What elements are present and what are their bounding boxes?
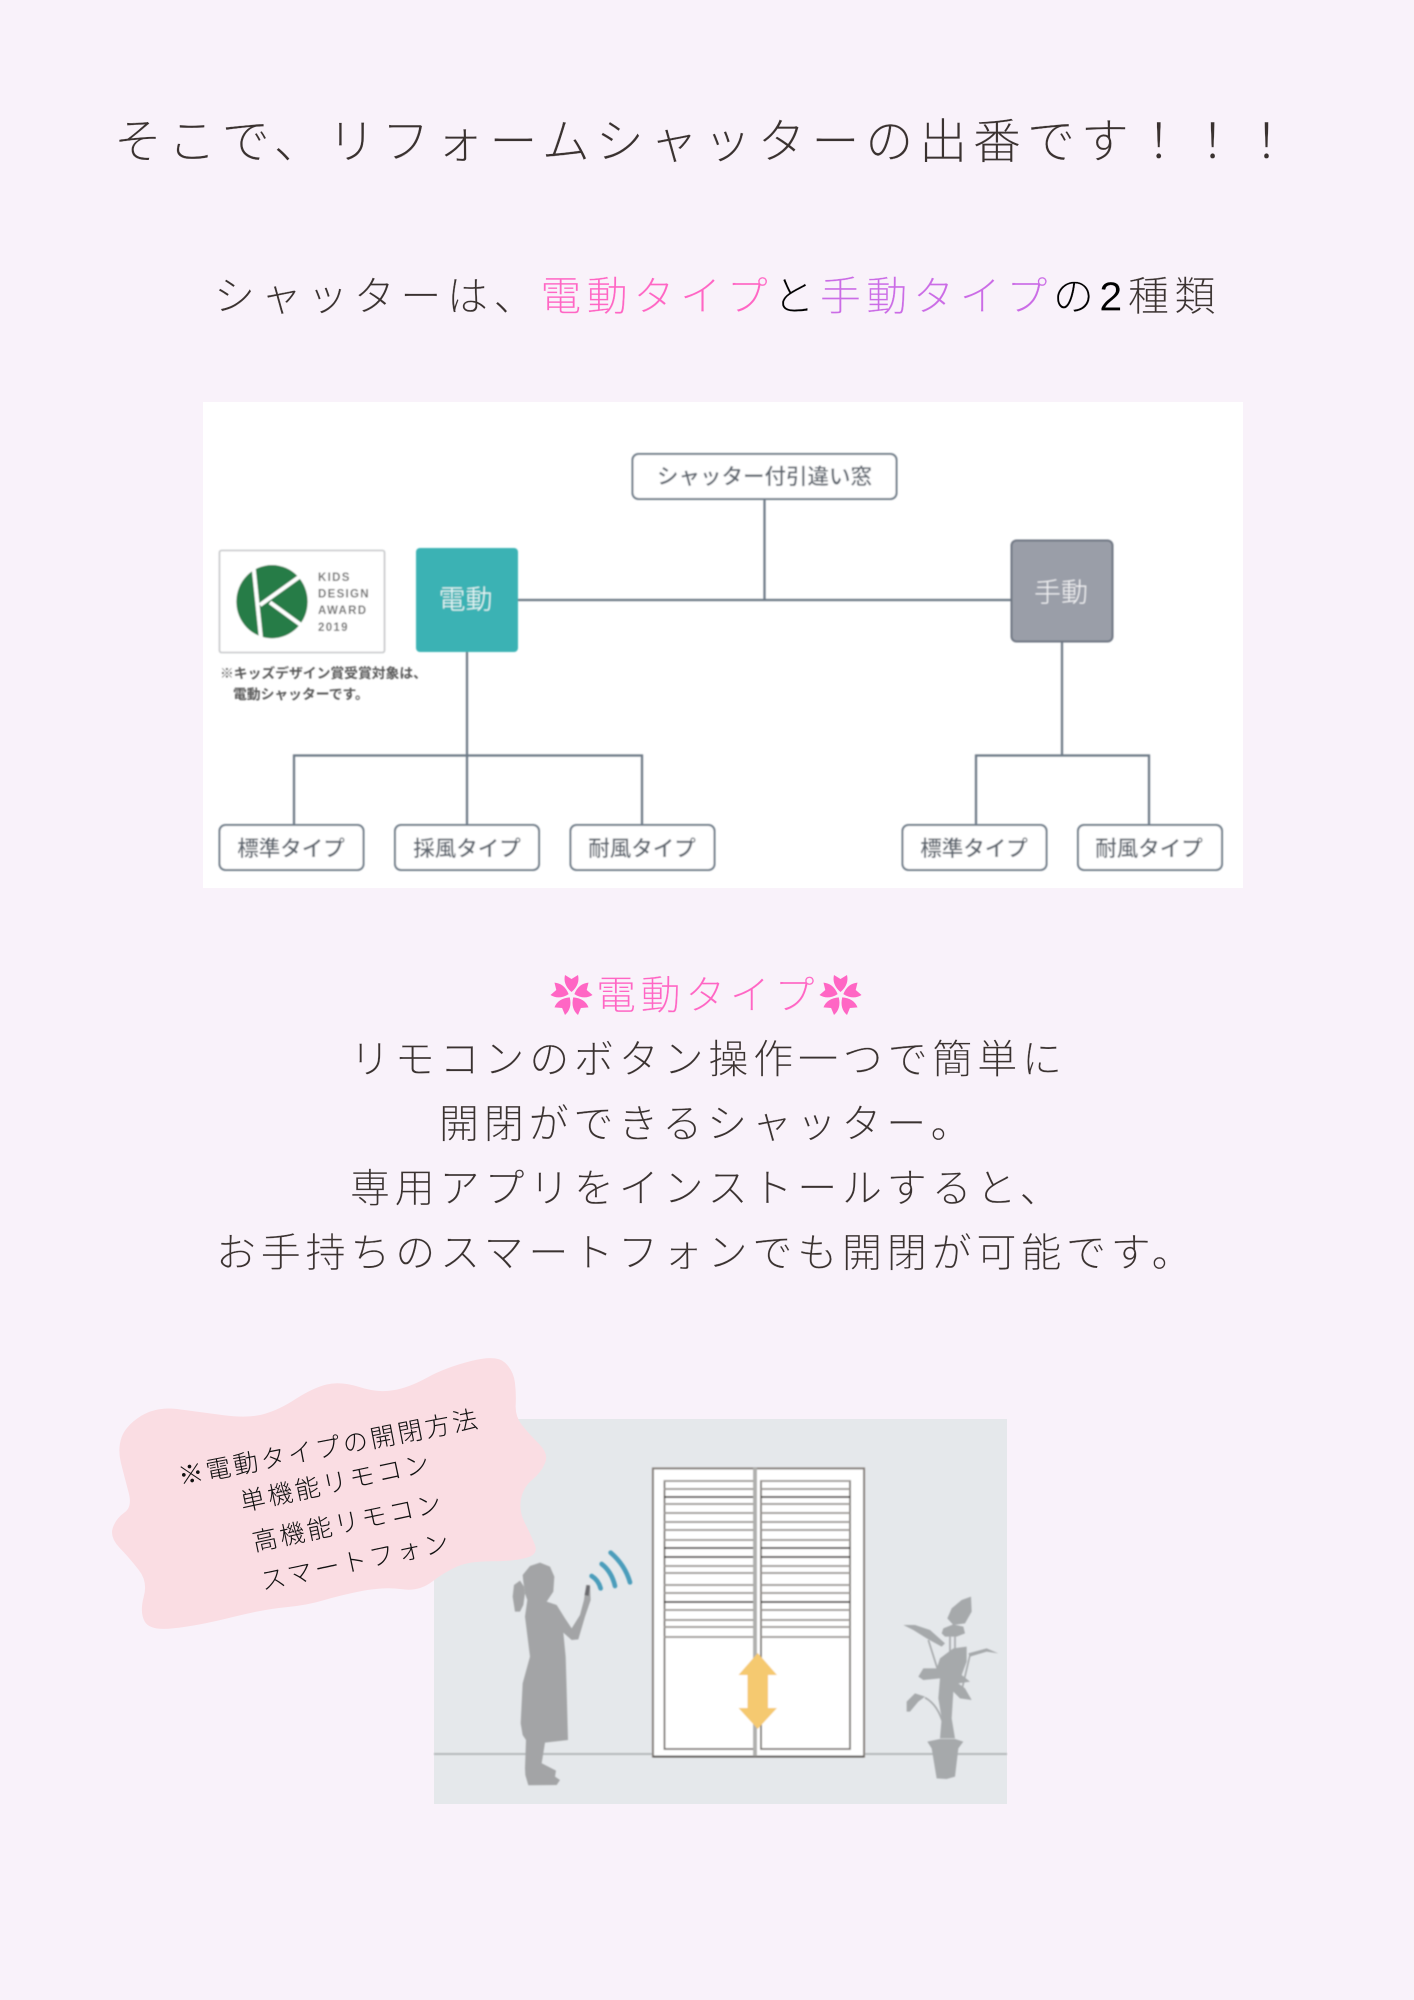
node: electric: 電動	[438, 585, 492, 615]
icon: flower left	[550, 975, 593, 1015]
badge: Kids Design Award: DESIGN	[318, 588, 370, 600]
box: electric standard	[220, 825, 364, 870]
badge: Kids Design Award	[220, 550, 384, 652]
box: manual standard: 標準タイプ	[920, 837, 1028, 861]
badge: Kids Design Award: KIDS	[318, 572, 351, 584]
box: electric standard: 標準タイプ	[237, 837, 345, 861]
arrow: open and close	[738, 1653, 777, 1729]
note: award target: ※キッズデザイン賞受賞対象は、	[220, 665, 427, 681]
text block: electric type description: リモコンのボタン操作一つで簡単に	[350, 1038, 1067, 1082]
node: electric	[416, 548, 518, 652]
box: root node	[632, 454, 896, 499]
callout: opening methods	[112, 1358, 546, 1629]
title: そこで、リフォームシャッターの出番です！！！	[114, 116, 1296, 169]
badge: Kids Design Award: 2019	[318, 622, 349, 634]
badge: Kids Design Award: AWARD	[318, 605, 367, 617]
text block: electric type description: 開閉ができるシャッター。	[439, 1102, 975, 1146]
icon: potted plant	[903, 1597, 998, 1779]
box: manual wind resistant	[1078, 825, 1222, 870]
window with shutter	[653, 1468, 864, 1756]
panel: shutter type tree diagram	[203, 402, 1243, 888]
icon: flower right	[819, 975, 862, 1015]
note: award target	[220, 665, 427, 702]
node: manual	[1012, 540, 1112, 642]
box: electric ventilation	[395, 825, 539, 870]
box: electric wind resistant: 耐風タイプ	[588, 837, 696, 861]
text block: electric type description: お手持ちのスマートフォンでも開閉が可能です。	[216, 1232, 1196, 1276]
note: award target: 電動シャッターです。	[233, 686, 369, 702]
box: manual wind resistant: 耐風タイプ	[1095, 837, 1203, 861]
text block: electric type description: 専用アプリをインストールすると、	[350, 1167, 1064, 1211]
callout: opening methods: スマートフォン	[258, 1528, 454, 1596]
callout: opening methods: 高機能リモコン	[250, 1489, 447, 1557]
illustration: person opening shutter with remote	[434, 1419, 1007, 1804]
node: manual: 手動	[1034, 578, 1088, 608]
icon: wireless signal	[592, 1553, 630, 1588]
subtitle: two shutter types: シャッターは、電動タイプと手動タイプの2種類	[214, 274, 1221, 320]
heading: electric type: 電動タイプ	[596, 974, 819, 1018]
callout: opening methods: ※電動タイプの開閉方法	[176, 1405, 483, 1491]
box: electric wind resistant	[570, 825, 714, 870]
text block: electric type description	[216, 1038, 1196, 1276]
box: manual standard	[902, 825, 1046, 870]
icon: person silhouette	[513, 1563, 591, 1785]
box: root node: シャッター付引違い窓	[657, 465, 872, 489]
callout: opening methods: 単機能リモコン	[238, 1449, 435, 1517]
box: electric ventilation: 採風タイプ	[413, 837, 521, 861]
